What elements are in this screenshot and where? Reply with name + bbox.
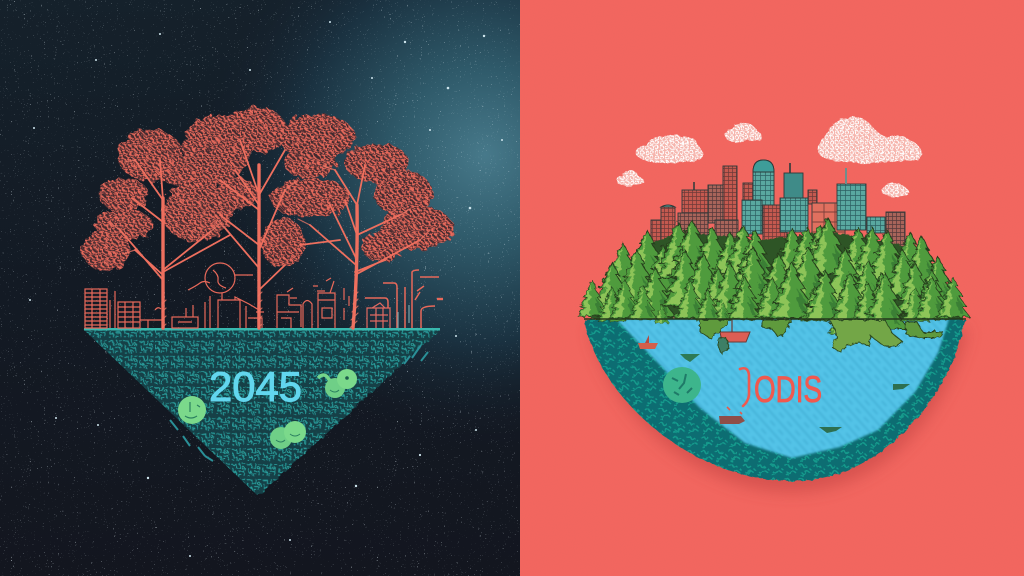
island bowl with reef rim [584, 319, 966, 481]
inverted triangle of circuit ground [84, 328, 440, 496]
water surface [616, 319, 949, 458]
tree trunks and branches [112, 140, 430, 328]
label: lODIS: ODIS [754, 369, 822, 410]
pine forest [577, 218, 970, 334]
green rock [663, 367, 701, 403]
panel: right coral background [520, 0, 1024, 576]
label: 2045: 2045 [209, 363, 302, 410]
city skyline [651, 160, 905, 252]
icon: green creatures bottom [270, 421, 306, 449]
island shadow [590, 328, 968, 492]
foliage hanging over the water [700, 320, 943, 354]
panel: left night sky background [0, 0, 520, 576]
label: lODIS [740, 368, 822, 410]
tree canopies in maze texture [82, 107, 453, 271]
icon: green creatures right [318, 369, 357, 398]
city skyline line art [85, 263, 443, 328]
icon: green creature left [178, 396, 206, 424]
illustration: 2045 digital forest [82, 107, 453, 496]
illustration: forest island [577, 117, 970, 492]
clouds [617, 117, 922, 197]
boats [638, 320, 910, 433]
shoreline [584, 318, 966, 320]
